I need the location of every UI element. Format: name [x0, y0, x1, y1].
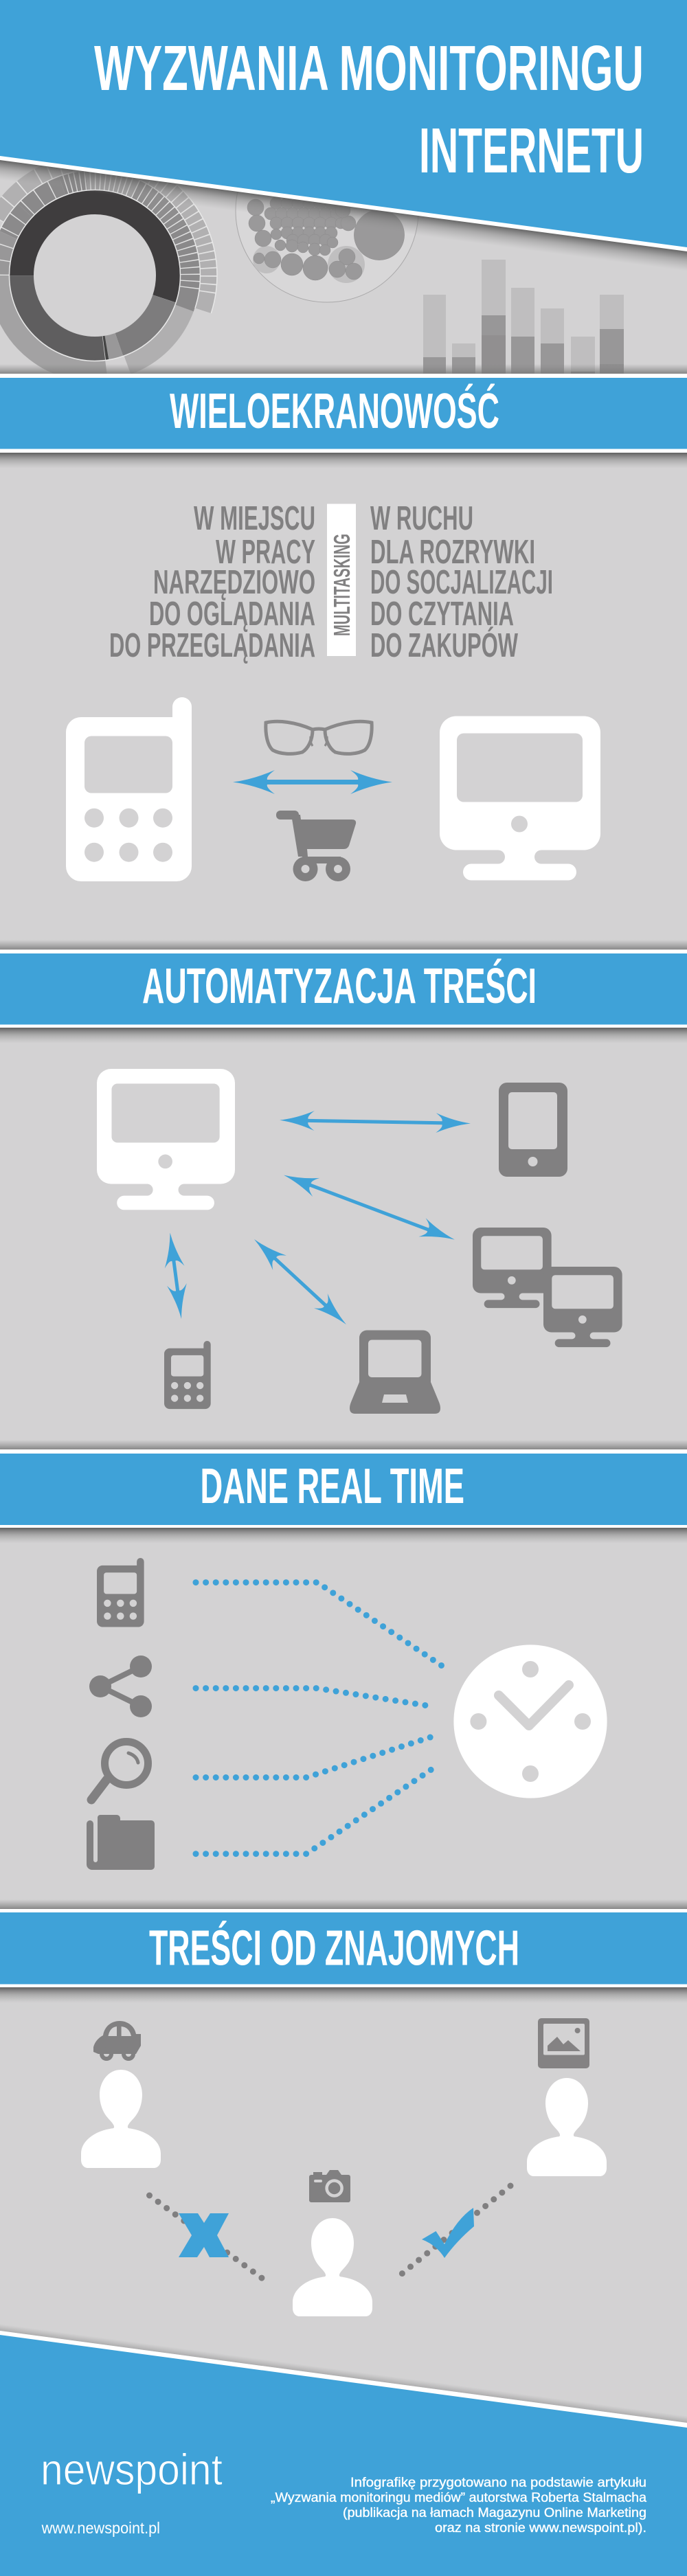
arrow: monitor to phone: [160, 1232, 191, 1320]
icon: white phone: [66, 697, 192, 881]
credits text: [271, 2476, 646, 2535]
left list: W PRACY: [216, 534, 315, 571]
credits text: (publikacja na łamach Magazynu Online Marketing: [343, 2506, 646, 2520]
icon: blue x: [179, 2213, 229, 2257]
icon: folder: [87, 1815, 155, 1870]
left list: DO OGLĄDANIA: [149, 596, 315, 633]
icon: phone source: [97, 1558, 144, 1627]
left list: [109, 500, 315, 664]
footer shadow: [0, 2324, 687, 2423]
right list: DO ZAKUPÓW: [370, 626, 518, 664]
section 1 band: [0, 364, 687, 468]
icon: glasses: [266, 721, 372, 754]
credits text: oraz na stronie www.newspoint.pl).: [435, 2521, 646, 2535]
heading: dane real time: DANE REAL TIME: [201, 1459, 464, 1514]
diagonal shadow: [0, 159, 687, 271]
footer: [0, 2331, 687, 2576]
icon: picture: [538, 2018, 589, 2068]
person: center: [293, 2218, 372, 2316]
icon: magnifier: [91, 1742, 148, 1800]
arrow: monitor to laptop: [247, 1232, 353, 1332]
arrow: between phone and monitor: [233, 770, 392, 794]
right list: DLA ROZRYWKI: [370, 534, 535, 571]
header chart collage: [0, 120, 624, 431]
icon: two desktop monitors: [473, 1228, 622, 1347]
icon: white monitor hub: [97, 1069, 235, 1210]
icon: laptop: [350, 1330, 440, 1414]
multitasking lists: [109, 500, 553, 664]
section 3 band: [0, 1440, 687, 1544]
dotted connectors to clock: [196, 1583, 446, 1854]
dotted link: left person to center: [150, 2195, 266, 2281]
right list: DO CZYTANIA: [370, 596, 514, 633]
bubble chart: [236, 120, 418, 302]
icon: clock: [453, 1645, 607, 1798]
arrow: monitor to tablet: [280, 1110, 471, 1133]
icon: share: [89, 1656, 152, 1717]
right list: W RUCHU: [370, 500, 473, 537]
arrow: monitor to desktops: [280, 1166, 458, 1249]
title: [94, 32, 644, 186]
section 4 band: [0, 1899, 687, 2003]
right list: [370, 500, 553, 664]
right list: DO SOCJALIZACJI: [370, 564, 553, 601]
icon: camera: [309, 2170, 350, 2202]
icon: tablet: [499, 1083, 567, 1177]
section 2 band: [0, 940, 687, 1043]
icon: shopping cart: [276, 811, 356, 881]
icon: small dark phone: [164, 1341, 211, 1409]
multitasking label bar: MULTITASKING: [329, 534, 354, 636]
multitasking label bar: [327, 504, 356, 656]
left list: W MIEJSCU: [194, 500, 315, 537]
website url: www.newspoint.pl: [41, 2519, 160, 2537]
left list: DO PRZEGLĄDANIA: [109, 627, 315, 664]
person: left: [81, 2070, 161, 2168]
person: right: [527, 2078, 607, 2176]
logo: newspoint: newspoint: [41, 2445, 223, 2494]
heading: wieloekranowość: WIELOEKRANOWOŚĆ: [170, 383, 499, 439]
icon: car: [93, 2021, 141, 2061]
credits text: „Wyzwania monitoringu mediów” autorstwa Roberta Stalmacha: [271, 2491, 646, 2505]
stacked bar chart: [423, 260, 624, 374]
icon: blue check: [422, 2208, 474, 2258]
header banner: [0, 0, 687, 251]
left list: NARZĘDZIOWO: [153, 564, 315, 601]
sunburst donut chart: [0, 120, 251, 431]
icon: white monitor: [440, 716, 600, 881]
credits text: Infografikę przygotowano na podstawie artykułu: [350, 2476, 646, 2490]
dotted link: right person to center: [398, 2186, 510, 2276]
